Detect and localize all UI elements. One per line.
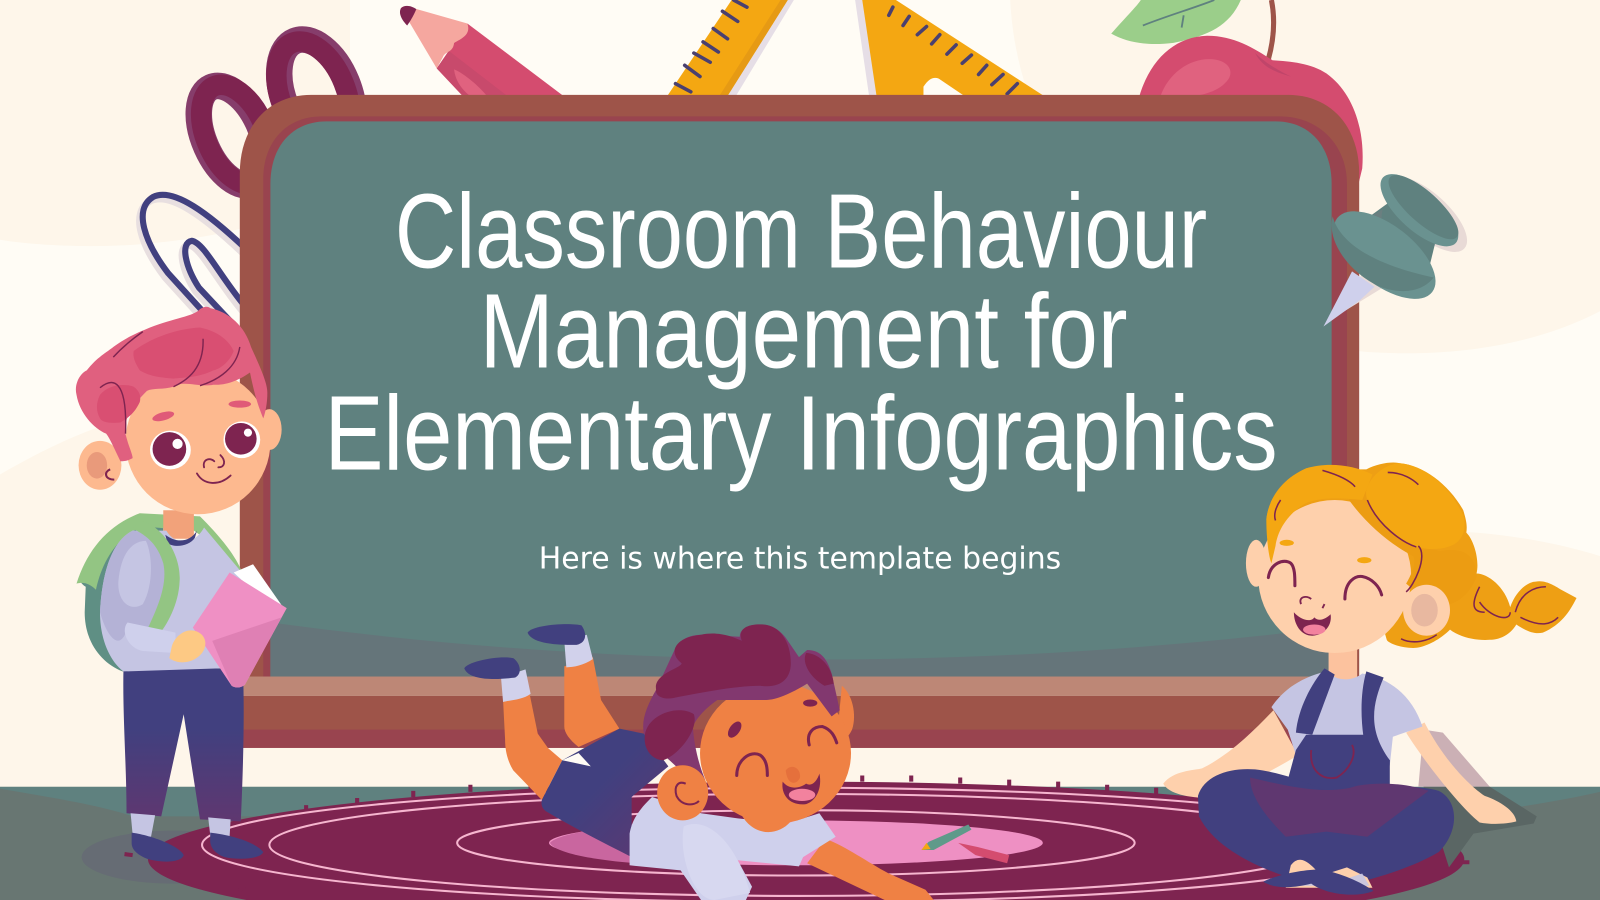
icon: teal pencil on rug [921,824,971,850]
character: boy with backpack [76,307,287,862]
icon: paper clip [140,195,245,356]
title: Management for [480,272,1128,390]
icon: push pin [1319,162,1479,327]
icon: set square [855,0,1044,98]
icon: apple [1111,0,1363,194]
icon: pink crayon on rug [958,843,1009,863]
title: Elementary Infographics [324,374,1278,492]
icon: scissors handles [185,29,368,196]
rug centre [549,820,1043,865]
character: boy lying on the rug [464,624,934,900]
title: Classroom Behaviour [395,172,1207,290]
character: girl sitting [1163,462,1577,895]
chalk ledge [243,677,1327,748]
title [324,172,1278,492]
chalkboard frame [240,95,1359,694]
rug [124,776,1469,900]
floor [0,787,1600,900]
subtitle: Here is where this template begins [539,541,1061,576]
board shadow [270,622,1332,679]
icon: yellow ruler [667,0,794,98]
icon: red pencil [400,6,571,102]
chalkboard surface [270,121,1332,679]
